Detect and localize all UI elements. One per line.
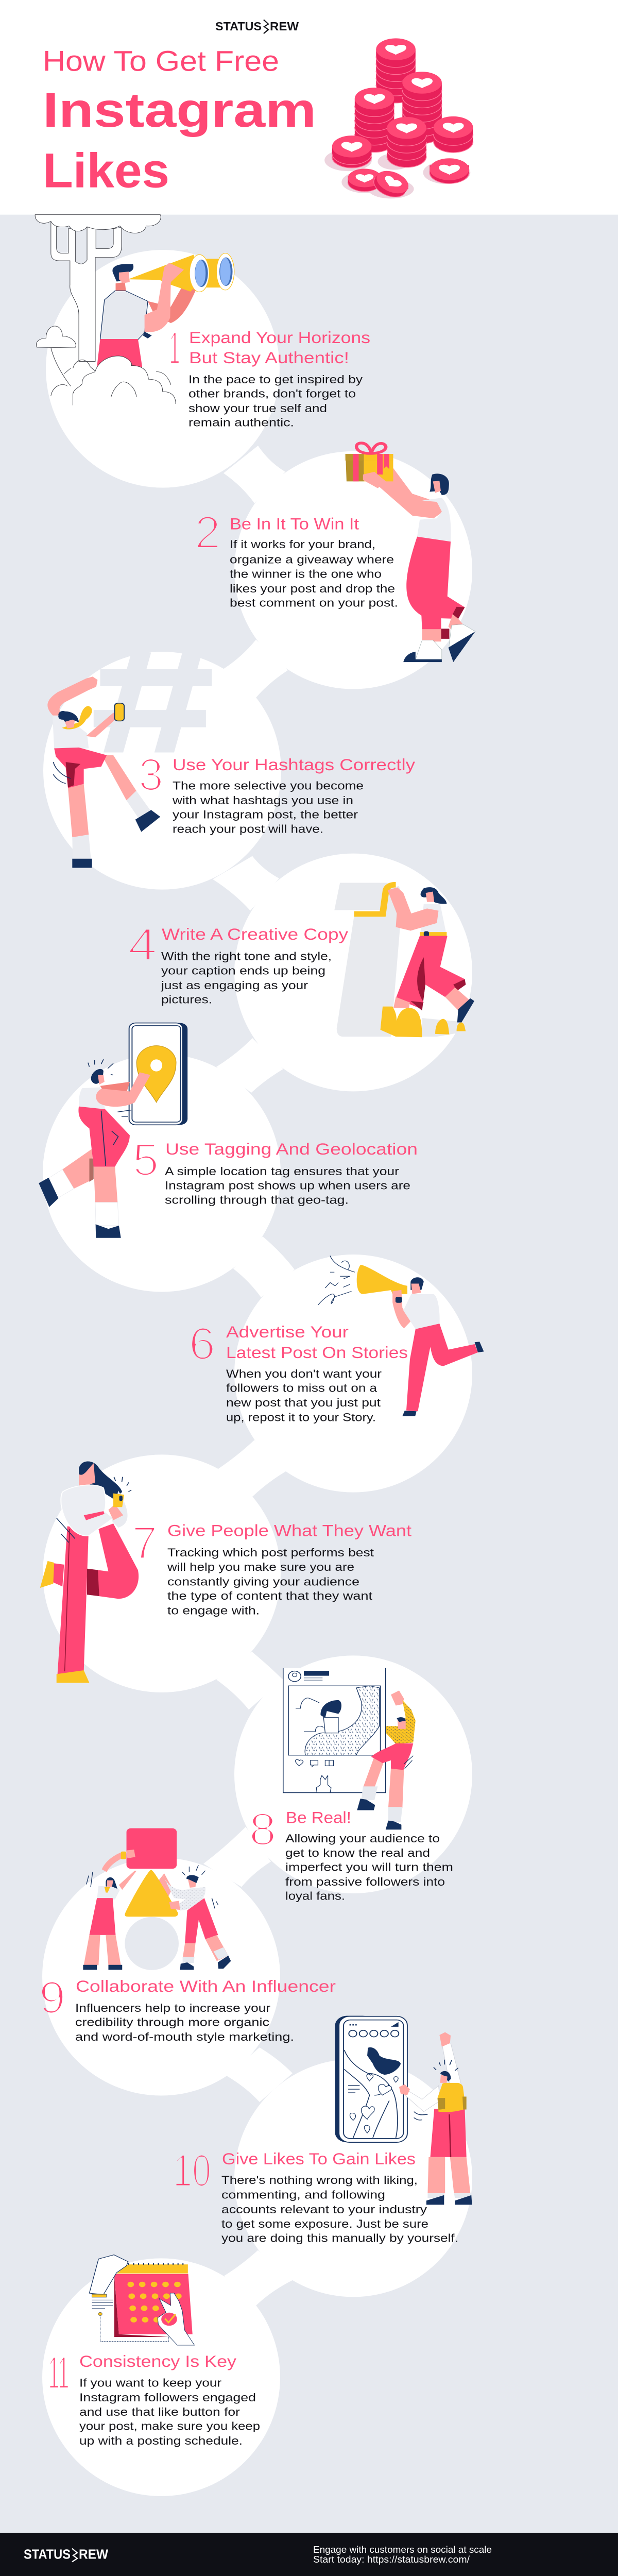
body text: When you don't want your	[226, 1368, 382, 1381]
body text: from passive followers into	[285, 1876, 445, 1888]
body text: your caption ends up being	[161, 965, 325, 977]
illustration: man shouting into a megaphone	[318, 1256, 484, 1416]
body text: the winner is the one who	[230, 568, 382, 581]
illustration: woman holding a gift	[345, 443, 475, 662]
number 7: 7	[132, 1517, 157, 1568]
body text: There's nothing wrong with liking,	[221, 2174, 418, 2187]
footer call to action: Engage with customers on social at scale	[313, 2545, 492, 2555]
footer logo: REW	[79, 2547, 108, 2562]
main title: Likes	[43, 143, 169, 198]
body text: likes your post and drop the	[230, 583, 395, 595]
step 3	[47, 653, 416, 870]
body text: Allowing your audience to	[285, 1833, 440, 1845]
number 2: 2	[195, 507, 220, 558]
body text: to get some exposure. Just be sure	[221, 2218, 428, 2231]
body text: scrolling through that geo-tag.	[165, 1194, 349, 1207]
illustration: woman jumping with hashtag	[47, 653, 212, 870]
heading: Write A Creative Copy	[162, 925, 349, 943]
body text: Tracking which post performs best	[167, 1547, 374, 1559]
body text: will help you make sure you are	[167, 1561, 354, 1574]
body text: In the pace to get inspired by	[188, 374, 363, 386]
heading: Consistency Is Key	[79, 2352, 237, 2370]
step 4	[128, 883, 474, 1037]
footer call to action	[313, 2545, 492, 2565]
body text: constantly giving your audience	[167, 1575, 359, 1588]
body text: the type of content that they want	[167, 1590, 372, 1602]
body text	[167, 1547, 374, 1617]
heading: Collaborate With An Influencer	[76, 1977, 336, 1995]
heading	[189, 329, 370, 367]
heading: But Stay Authentic!	[189, 349, 349, 367]
body text	[226, 1368, 382, 1424]
body text	[172, 779, 364, 836]
body text: your post, make sure you keep	[79, 2420, 260, 2433]
illustration: woman on one leg checking phone	[40, 1461, 139, 1683]
body text	[161, 950, 332, 1006]
body text	[230, 538, 398, 609]
heading: Be In It To Win It	[230, 515, 359, 533]
step 8	[249, 1668, 453, 1903]
body text: accounts relevant to your industry	[221, 2204, 427, 2216]
body text	[285, 1833, 453, 1903]
header logo: STATUS	[215, 20, 262, 33]
body text: reach your post will have.	[173, 823, 323, 836]
body text: If you want to keep your	[79, 2377, 221, 2389]
body text: With the right tone and style,	[161, 950, 332, 963]
number 6: 6	[189, 1318, 215, 1369]
heading: Give People What They Want	[167, 1522, 411, 1540]
body text: pictures.	[161, 993, 212, 1006]
body text: imperfect you will turn them	[285, 1861, 453, 1874]
body text: organize a giveaway where	[230, 553, 394, 566]
header logo	[215, 20, 299, 33]
main title	[43, 45, 316, 198]
body text: A simple location tag ensures that your	[165, 1165, 399, 1178]
step 9	[39, 1828, 336, 2043]
number 4: 4	[128, 919, 157, 970]
body text	[221, 2174, 458, 2245]
body text: with what hashtags you use in	[172, 794, 353, 807]
body text: up with a posting schedule.	[79, 2435, 243, 2447]
step 6	[189, 1256, 484, 1424]
illustration: two people stacking shapes	[83, 1828, 231, 1970]
body text: remain authentic.	[188, 416, 294, 429]
white blob path connecting all steps	[42, 250, 472, 2496]
illustration: woman with long caption scroll	[334, 883, 474, 1037]
body text: you are doing this manually by yourself.	[221, 2232, 458, 2245]
illustration: calendar with hands and check mark	[89, 2255, 195, 2345]
body text: best comment on your post.	[230, 597, 398, 609]
body text: Influencers help to increase your	[75, 2002, 270, 2014]
illustration: man climbing out of a social post	[283, 1668, 416, 1829]
heading	[226, 1323, 408, 1362]
footer logo: STATUS	[24, 2547, 71, 2562]
number 8: 8	[249, 1803, 276, 1855]
icon: stacks of heart coins	[324, 38, 473, 201]
step 1: 1	[169, 322, 180, 374]
body text: your Instagram post, the better	[173, 808, 358, 821]
number 5: 5	[133, 1134, 159, 1185]
body text: If it works for your brand,	[230, 538, 375, 551]
body text: other brands, don't forget to	[188, 388, 356, 400]
body text: new post that you just put	[226, 1397, 381, 1409]
body text: commenting, and following	[221, 2189, 385, 2201]
main title: How To Get Free	[43, 45, 279, 77]
step 11: 11	[48, 2347, 69, 2398]
body text: and use that like button for	[79, 2406, 240, 2419]
body text: The more selective you become	[173, 779, 364, 792]
number 10: 10	[173, 2145, 211, 2196]
heading: Latest Post On Stories	[226, 1344, 408, 1362]
body text: loyal fans.	[285, 1890, 345, 1903]
body text: Instagram followers engaged	[79, 2392, 256, 2404]
body text	[165, 1165, 410, 1207]
number 9: 9	[39, 1972, 65, 2023]
footer	[0, 2533, 618, 2576]
body text: just as engaging as your	[161, 979, 308, 992]
illustration: man tagging a location pin on a phone	[39, 1023, 187, 1238]
heading: Expand Your Horizons	[189, 329, 370, 347]
body text	[188, 374, 363, 429]
body text: followers to miss out on a	[226, 1382, 377, 1395]
heading: Advertise Your	[226, 1323, 349, 1341]
body text: and word-of-mouth style marketing.	[75, 2031, 294, 2043]
body text: up, repost it to your Story.	[226, 1411, 376, 1424]
step 1	[35, 215, 370, 429]
main title: Instagram	[43, 83, 316, 138]
header panel	[0, 0, 618, 215]
step 11	[48, 2255, 260, 2447]
body text	[79, 2377, 260, 2447]
body text: to engage with.	[167, 1604, 260, 1617]
heading: Use Your Hashtags Correctly	[173, 756, 416, 774]
step 7	[40, 1461, 411, 1683]
heading: Be Real!	[286, 1808, 351, 1827]
footer call to action: Start today: https://statusbrew.com/	[313, 2555, 470, 2565]
body text: Instagram post shows up when users are	[165, 1179, 410, 1192]
body text: get to know the real and	[285, 1847, 430, 1860]
illustration: person liking a post on a giant phone	[335, 2016, 472, 2205]
step 10	[173, 2016, 472, 2245]
step 5	[39, 1023, 418, 1238]
body text: show your true self and	[188, 402, 327, 415]
illustration: man with binoculars by a tree	[35, 215, 234, 405]
step 2	[195, 443, 475, 662]
body text	[75, 2002, 294, 2043]
heading: Use Tagging And Geolocation	[165, 1140, 418, 1158]
header logo: REW	[270, 20, 299, 33]
number 3: 3	[139, 749, 163, 800]
heading: Give Likes To Gain Likes	[222, 2150, 416, 2168]
body text: credibility through more organic	[75, 2016, 269, 2029]
